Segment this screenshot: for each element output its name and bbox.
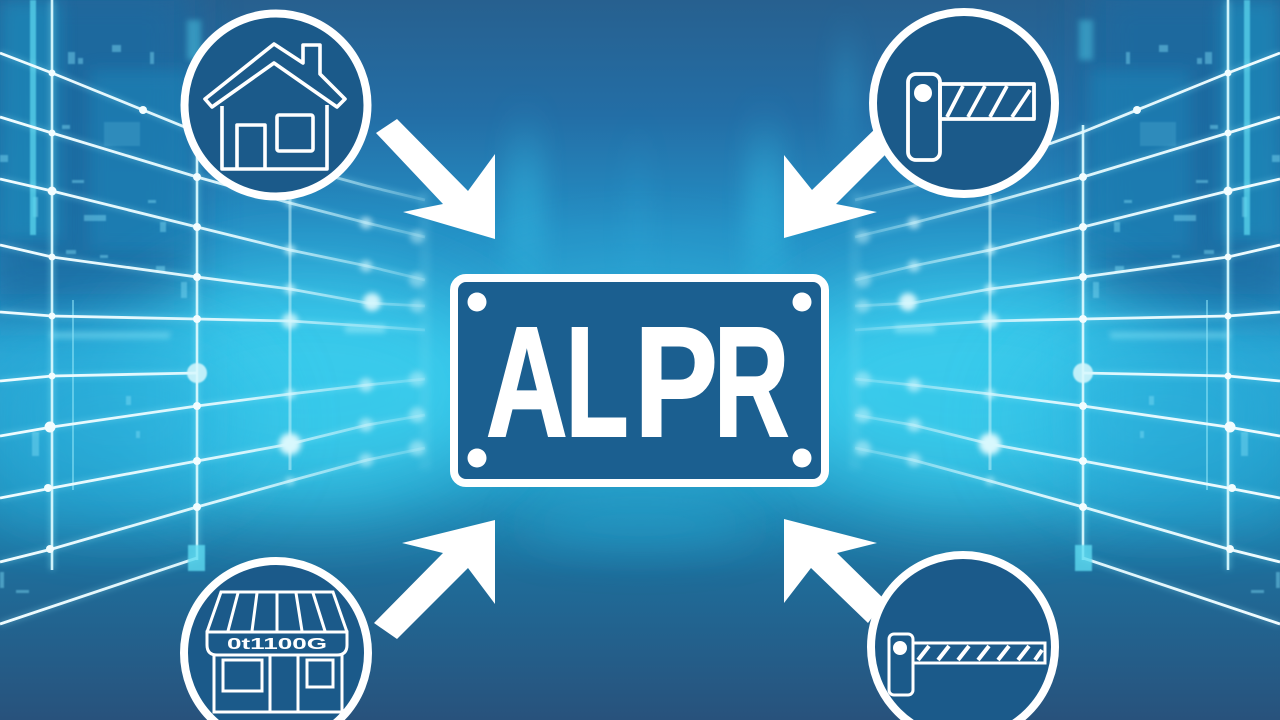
icon: barrier gate in circle, top right <box>873 12 1055 194</box>
arrow: bottom left <box>374 520 495 639</box>
shop sign text: 0t1100G <box>227 636 327 653</box>
arrow: bottom right <box>784 519 885 623</box>
arrow: top left <box>376 119 495 239</box>
icon: shop in circle <box>184 561 368 720</box>
plate title: A <box>486 294 568 469</box>
license plate <box>454 278 825 483</box>
plate title: L <box>565 296 629 470</box>
plate bolts <box>468 292 812 468</box>
background glow streaks <box>420 60 860 547</box>
circuit grid: right <box>770 0 1280 624</box>
icon: house in circle <box>184 14 368 196</box>
icon: barrier gate in circle, bottom right <box>871 555 1055 720</box>
arrow: top right <box>784 126 890 238</box>
plate title: P <box>634 295 718 470</box>
plate title: R <box>714 295 789 470</box>
plate title <box>486 294 789 470</box>
circuit grid: left <box>0 0 510 624</box>
